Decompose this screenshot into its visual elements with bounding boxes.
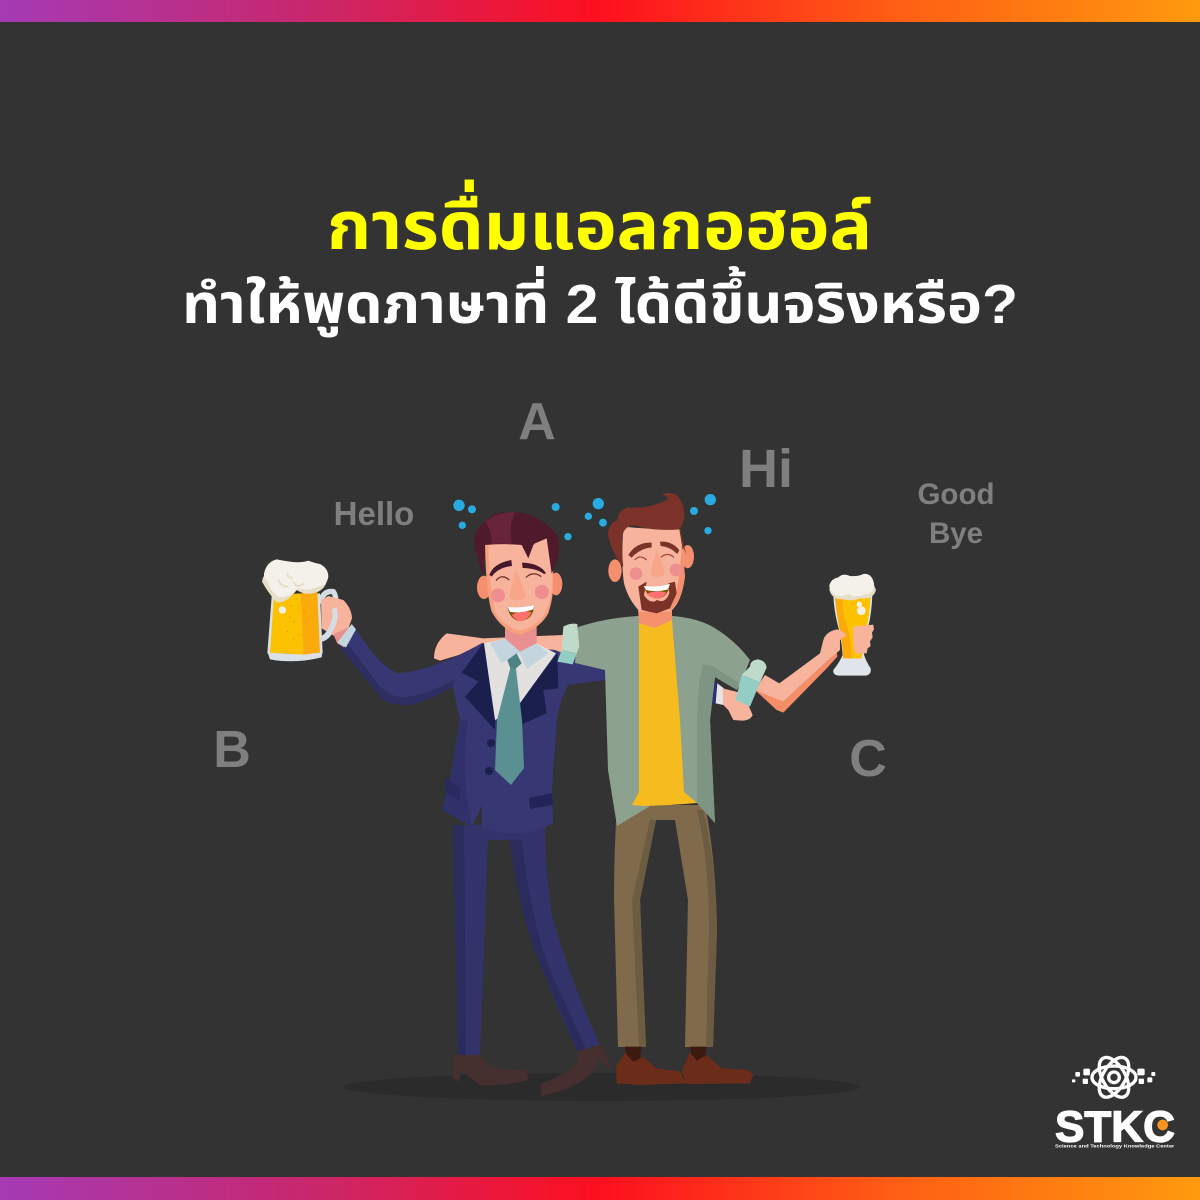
top gradient bar — [0, 0, 1200, 22]
man in suit: hand behind friend — [712, 682, 753, 721]
man in suit: jacket and arm — [340, 627, 606, 834]
floating words — [213, 393, 995, 788]
arm around shoulder — [434, 633, 567, 661]
floating words: Hi — [739, 439, 793, 499]
friend: head — [608, 493, 694, 613]
floating words: Hello — [334, 495, 414, 532]
title: การดื่มแอลกอฮอล์ — [327, 179, 872, 264]
dizzy bubbles — [453, 494, 716, 540]
logo atom — [1092, 1053, 1136, 1102]
friend: jacket and shirt — [557, 610, 750, 826]
man in suit: legs and shoes — [453, 825, 612, 1096]
beer mug — [262, 559, 356, 661]
floating words: A — [518, 393, 556, 451]
friend: forearm and beer glass — [736, 574, 876, 713]
bottom gradient bar — [0, 1177, 1200, 1200]
friend: legs and shoes — [614, 805, 753, 1085]
STKC logo: Science and Technology Knowledge Center — [1055, 1143, 1175, 1148]
floating words: C — [849, 730, 887, 788]
ground shadow — [344, 1073, 860, 1101]
STKC logo — [1055, 1053, 1175, 1152]
title — [182, 179, 1018, 338]
floating words: Bye — [929, 517, 983, 550]
floating words: B — [213, 721, 251, 779]
man in suit: head — [474, 512, 562, 635]
STKC logo: STKC — [1055, 1104, 1175, 1152]
title: ทำให้พูดภาษาที่ 2 ได้ดีขึ้นจริงหรือ? — [182, 265, 1018, 338]
floating words: Good — [917, 478, 995, 511]
